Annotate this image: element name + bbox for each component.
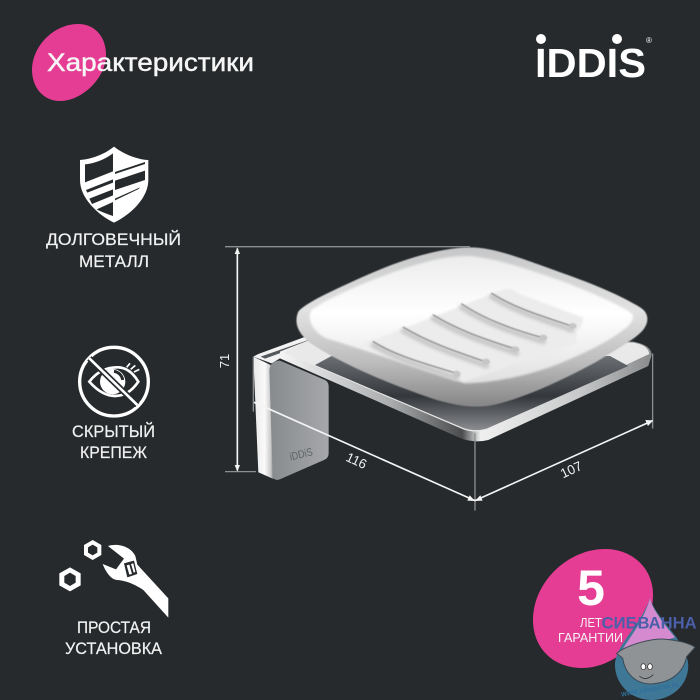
label: simple installation: УСТАНОВКА <box>65 640 162 658</box>
bathtub face <box>639 664 653 679</box>
label: hidden fastening: СКРЫТЫЙ <box>72 422 155 441</box>
watermark url: www.sibvanna.ru <box>620 680 680 699</box>
label: hidden fastening <box>72 422 155 462</box>
warranty text: ГАРАНТИИ <box>558 630 623 645</box>
label: durable metal <box>46 230 181 271</box>
watermark: Sibvanna <box>602 598 697 700</box>
label: simple installation: ПРОСТАЯ <box>77 619 151 637</box>
dimension: 116: 116 <box>344 449 369 472</box>
water drop <box>615 598 688 700</box>
heading text: Характеристики <box>47 49 254 77</box>
warranty badge <box>533 549 653 668</box>
product: soap dish with dimensions <box>225 247 653 511</box>
label: hidden fastening: КРЕПЕЖ <box>80 444 148 462</box>
warranty text <box>558 615 623 645</box>
heading: Характеристики <box>32 24 254 101</box>
icon: crossed-out eye <box>80 347 148 416</box>
label: durable metal: МЕТАЛЛ <box>79 252 149 271</box>
logo: iDDiS: IDDIS <box>535 40 646 86</box>
dimension: 71: 71 <box>217 354 232 368</box>
pink blob behind heading <box>32 24 106 101</box>
warranty text: ЛЕТ <box>580 615 602 630</box>
wall mount <box>253 335 329 480</box>
feature: durable metal <box>46 147 181 271</box>
feature: hidden fastening <box>72 347 155 462</box>
mount logo: iDDiS <box>288 446 314 464</box>
icon: shield <box>80 147 148 223</box>
pink blob <box>533 549 653 668</box>
shelf plate <box>280 338 652 441</box>
logo: iDDiS: ® <box>646 36 652 45</box>
label: durable metal: ДОЛГОВЕЧНЫЙ <box>46 230 181 249</box>
soap ribs <box>362 289 583 382</box>
dimension: 107: 107 <box>558 458 584 481</box>
frosted dish <box>296 247 647 407</box>
bathtub <box>617 639 695 684</box>
icon: wrench and nuts <box>59 540 168 618</box>
warranty years: 5 <box>577 560 605 616</box>
dimension lines <box>225 247 653 511</box>
label: simple installation <box>65 619 162 658</box>
feature: simple installation <box>59 540 168 658</box>
watermark name: СИБВАННА <box>602 614 697 633</box>
